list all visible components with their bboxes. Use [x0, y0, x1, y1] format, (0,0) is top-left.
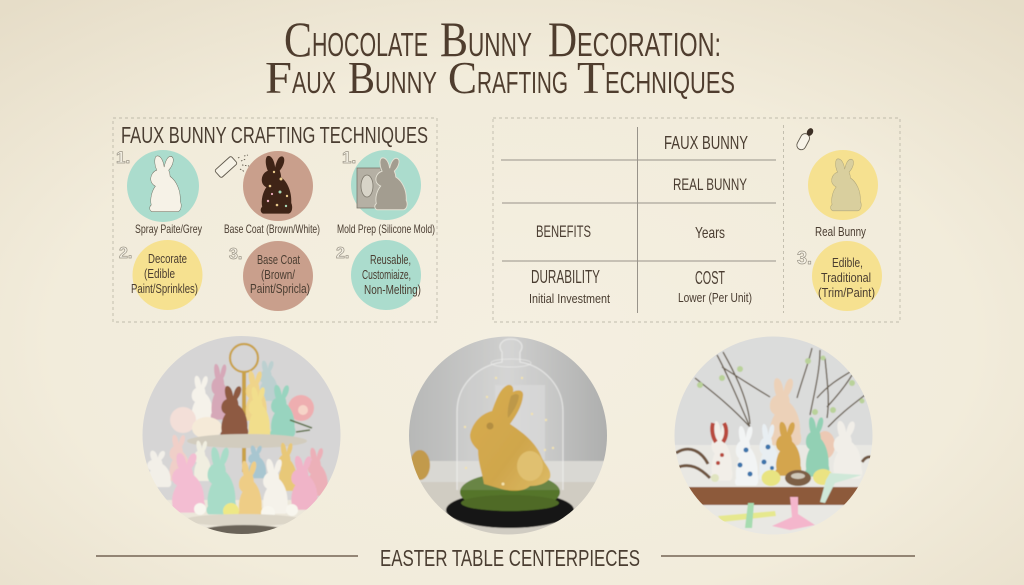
edible circle: Edible, [832, 255, 863, 270]
panel: faux vs real comparison [493, 118, 900, 322]
real bunny circle [808, 150, 878, 239]
step: decorate: (Edible [144, 266, 175, 281]
icon: spray can [214, 155, 249, 178]
title: ECHNIQUES [605, 65, 735, 100]
real bunny circle: Real Bunny [815, 224, 866, 239]
comparison table [501, 125, 784, 313]
edible circle: (Trim/Paint) [818, 285, 875, 300]
step: decorate: 2. [119, 245, 132, 262]
comparison table: BENEFITS [536, 222, 591, 241]
photo: tiered tray of pastel bunnies [140, 335, 344, 537]
title: T [577, 52, 605, 103]
title: F [265, 52, 292, 103]
step: base coat: 3. [229, 246, 242, 263]
step: decorate [119, 240, 202, 310]
step: base coat: (Brown/ [261, 267, 295, 282]
comparison table: FAUX BUNNY [664, 133, 748, 153]
title: UNNY [375, 65, 437, 100]
comparison table: DURABILITY [531, 267, 600, 287]
step: base coat [229, 241, 313, 311]
photo: gold bunny under glass cloche [405, 335, 611, 537]
edible circle [797, 241, 882, 311]
step: reusable: Reusable, [370, 252, 411, 267]
step: base coat: Base Coat [257, 252, 300, 267]
edible circle: 3. [797, 248, 812, 268]
photo: bunnies on wooden tray with branches [670, 335, 878, 537]
title: B [348, 52, 375, 103]
title: ECORATION: [577, 26, 721, 63]
title: B [440, 11, 468, 67]
step: spray paint: 1. [116, 148, 130, 167]
step: reusable: Non-Melting) [364, 282, 421, 297]
step: reusable: 2. [336, 245, 349, 262]
step: reusable: Customiaize, [362, 267, 411, 282]
step: base coat with chocolate bunny: Base Coat (Brown/White) [224, 222, 320, 236]
step: decorate: Paint/Sprinkles) [131, 281, 198, 296]
step: decorate: Decorate [148, 251, 187, 266]
title [265, 11, 735, 103]
comparison table: Lower (Per Unit) [678, 290, 752, 305]
step: mold prep: 1. [342, 148, 356, 167]
title: UNNY [468, 26, 532, 63]
title: C [284, 11, 312, 67]
title: AUX [292, 65, 336, 100]
step: base coat with chocolate bunny [224, 151, 320, 236]
title: RAFTING [477, 65, 568, 100]
section heading: easter table centerpieces: EASTER TABLE CENTERPIECES [380, 545, 640, 571]
comparison table: Initial Investment [529, 291, 610, 306]
edible circle: Traditional [821, 270, 871, 285]
icon: dropper [795, 127, 815, 151]
step: base coat: Paint/Spricla) [250, 281, 310, 296]
comparison table: COST [695, 268, 725, 288]
panel: faux bunny crafting techniques [113, 118, 437, 322]
comparison table: Years [695, 225, 725, 242]
step: spray paint [116, 148, 202, 236]
step: mold prep [337, 148, 435, 236]
step: reusable [336, 240, 421, 310]
step: spray paint: Spray Paite/Grey [135, 222, 202, 236]
title: C [448, 52, 477, 103]
title: D [548, 11, 577, 67]
title: HOCOLATE [312, 26, 428, 63]
step: mold prep: Mold Prep (Silicone Mold) [337, 222, 435, 236]
comparison table: REAL BUNNY [673, 175, 747, 194]
panel heading: FAUX BUNNY CRAFTING TECHNIQUES [121, 122, 428, 148]
